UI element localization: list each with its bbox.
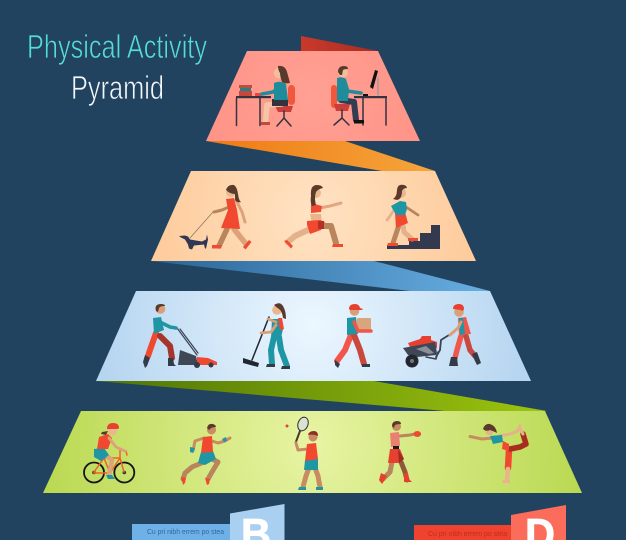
figure: woman sweeping [243,303,290,369]
title: Physical Activity [27,28,207,65]
panel: tier 4 vigorous activity [43,411,582,493]
figure: woman climbing stairs [387,185,440,249]
ribbon: blue [151,261,490,291]
figure: man carrying box [335,304,371,368]
panel: tier 1 sedentary [206,51,420,141]
figure: runner [181,424,230,485]
panel: tier 2 light activity [151,171,476,261]
figure: yoga pose [470,424,526,483]
option tab D: Cu pri nibh errem po stea [428,529,508,538]
figure: woman walking dog [179,185,252,250]
figure: man with wheelbarrow [403,304,481,368]
title: Pyramid [71,69,164,106]
figure: boxer [379,421,421,484]
figure: man with lawn mower [143,304,217,368]
ribbon: orange [206,141,435,171]
fold: top red [301,36,378,51]
option tab B: Cu pri nibh errem po stea [147,527,225,536]
option tab B [132,504,284,540]
figure: tennis player [286,416,323,490]
figure: cyclist [84,423,134,482]
figure: woman lunging [284,185,343,248]
option tab D [414,505,566,540]
ribbon: green [96,381,547,411]
panel: tier 3 moderate activity [96,291,531,381]
title [27,28,207,106]
figure: woman at desk [236,66,295,126]
figure: man at computer [331,66,387,125]
